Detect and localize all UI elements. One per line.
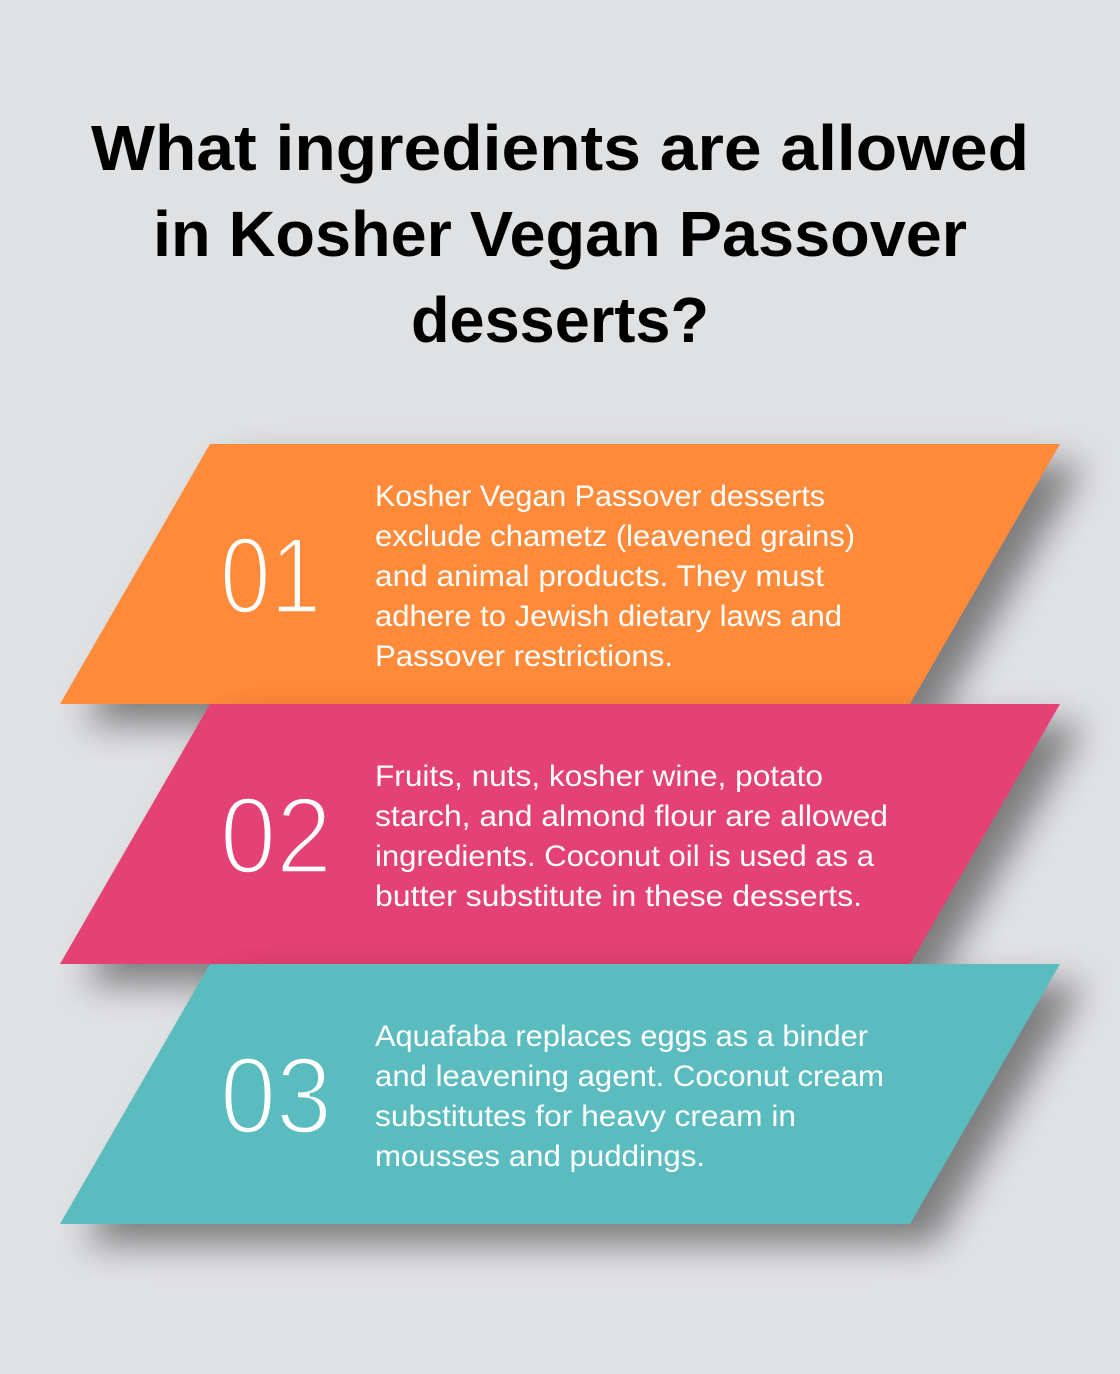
text block 01: exclude chametz (leavened grains) <box>375 520 855 553</box>
band: teal <box>60 964 1060 1224</box>
text block 01: adhere to Jewish dietary laws and <box>375 600 842 633</box>
text block 03 <box>375 1020 884 1173</box>
text block 01: and animal products. They must <box>375 560 824 593</box>
text block 02: Fruits, nuts, kosher wine, potato <box>375 760 823 793</box>
text block 03: substitutes for heavy cream in <box>375 1100 796 1133</box>
band: orange <box>60 444 1060 704</box>
title: desserts? <box>411 284 709 356</box>
text block 02: ingredients. Coconut oil is used as a <box>375 840 875 873</box>
number 03: 03 <box>220 1035 332 1157</box>
number 01: 01 <box>220 515 321 637</box>
text block 02: butter substitute in these desserts. <box>375 880 862 913</box>
title <box>91 112 1029 356</box>
panel: step 02 <box>60 704 1084 984</box>
title: What ingredients are allowed <box>91 112 1029 184</box>
text block 03: mousses and puddings. <box>375 1140 705 1173</box>
text block 02: starch, and almond flour are allowed <box>375 800 888 833</box>
number 02: 02 <box>220 775 332 897</box>
panel: step 01 <box>60 444 1084 724</box>
title: in Kosher Vegan Passover <box>153 198 967 270</box>
text block 03: Aquafaba replaces eggs as a binder <box>375 1020 868 1053</box>
panel: step 03 <box>60 964 1084 1244</box>
text block 01: Passover restrictions. <box>375 640 673 673</box>
text block 03: and leavening agent. Coconut cream <box>375 1060 884 1093</box>
text block 02 <box>375 760 888 913</box>
text block 01: Kosher Vegan Passover desserts <box>375 480 825 513</box>
band: pink <box>60 704 1060 964</box>
text block 01 <box>375 480 855 673</box>
